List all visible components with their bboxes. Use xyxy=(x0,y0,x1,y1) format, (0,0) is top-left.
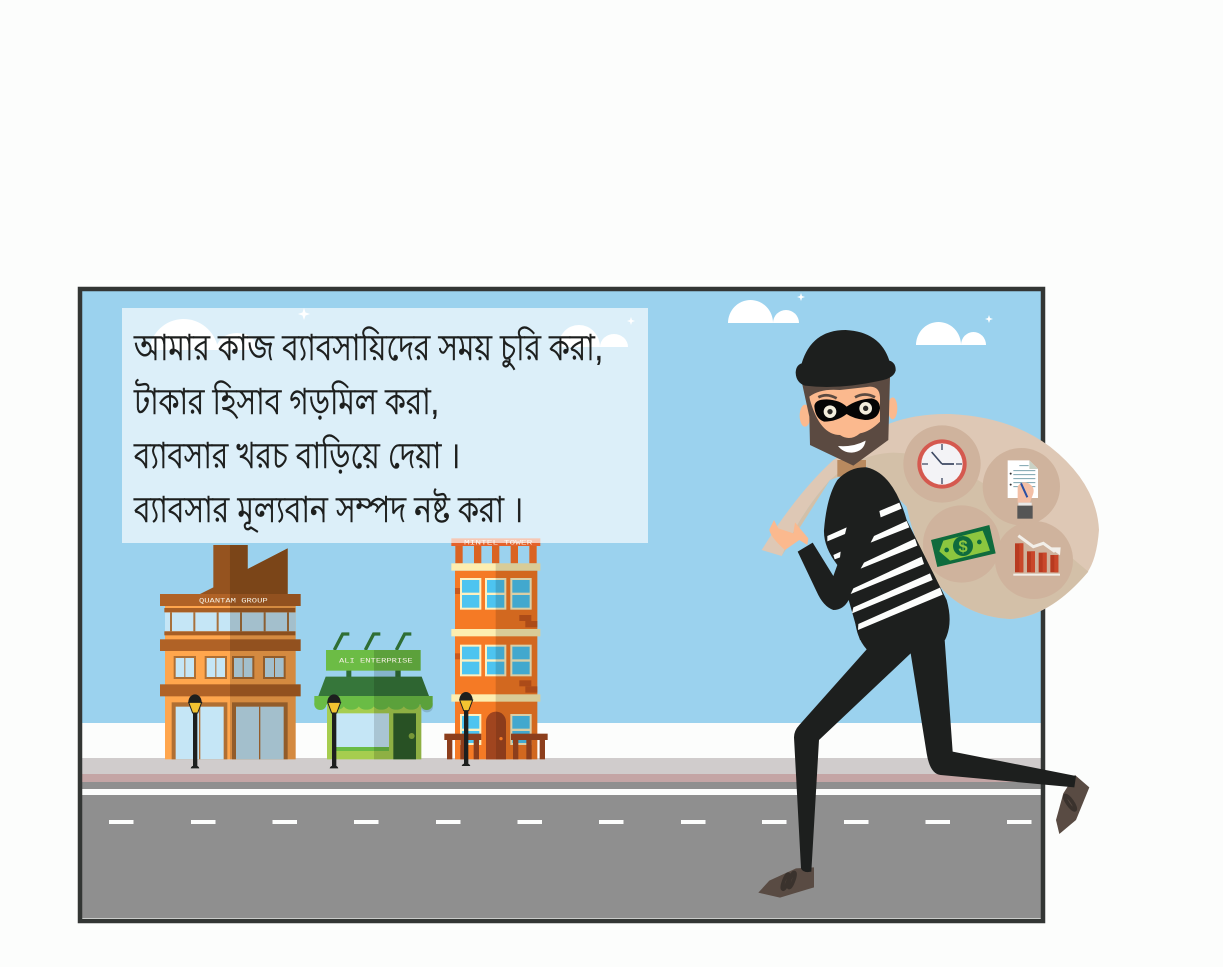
building: Ali Enterprise shop xyxy=(314,634,433,759)
street lamps xyxy=(188,692,473,768)
building: Ali Enterprise shop: ALI ENTERPRISE xyxy=(339,657,413,665)
loot sack xyxy=(762,414,1099,619)
icon: banknote xyxy=(931,525,996,567)
building: Mintel Tower: MINTEL TOWER xyxy=(464,539,532,547)
icon: falling bar chart xyxy=(1013,536,1061,576)
building: Mintel Tower xyxy=(444,538,548,759)
head xyxy=(796,330,897,466)
thief legs and shoes xyxy=(758,620,1089,898)
text panel xyxy=(122,308,648,543)
neck xyxy=(837,460,866,477)
icon: banknote: $ xyxy=(958,537,968,556)
hand xyxy=(769,520,808,550)
icon: clock xyxy=(917,439,967,489)
street scene frame xyxy=(80,289,1043,921)
text: line two: টাকার হিসাব গড়মিল করা, xyxy=(133,379,439,422)
torso and arm xyxy=(798,467,950,640)
stripes xyxy=(827,503,943,630)
text: line three: ব্যাবসার খরচ বাড়িয়ে দেয়া । xyxy=(133,435,460,476)
building: Quantam Group: QUANTAM GROUP xyxy=(199,597,268,605)
text: line four: ব্যাবসার মূল্যবান সম্পদ নষ্ট করা । xyxy=(133,489,523,532)
clouds xyxy=(149,293,993,350)
text: line one: আমার কাজ ব্যাবসায়িদের সময় চুরি করা, xyxy=(133,327,603,370)
icon: document with hand xyxy=(1008,460,1038,519)
thief upper body xyxy=(769,330,950,640)
building: Quantam Group xyxy=(160,545,301,759)
